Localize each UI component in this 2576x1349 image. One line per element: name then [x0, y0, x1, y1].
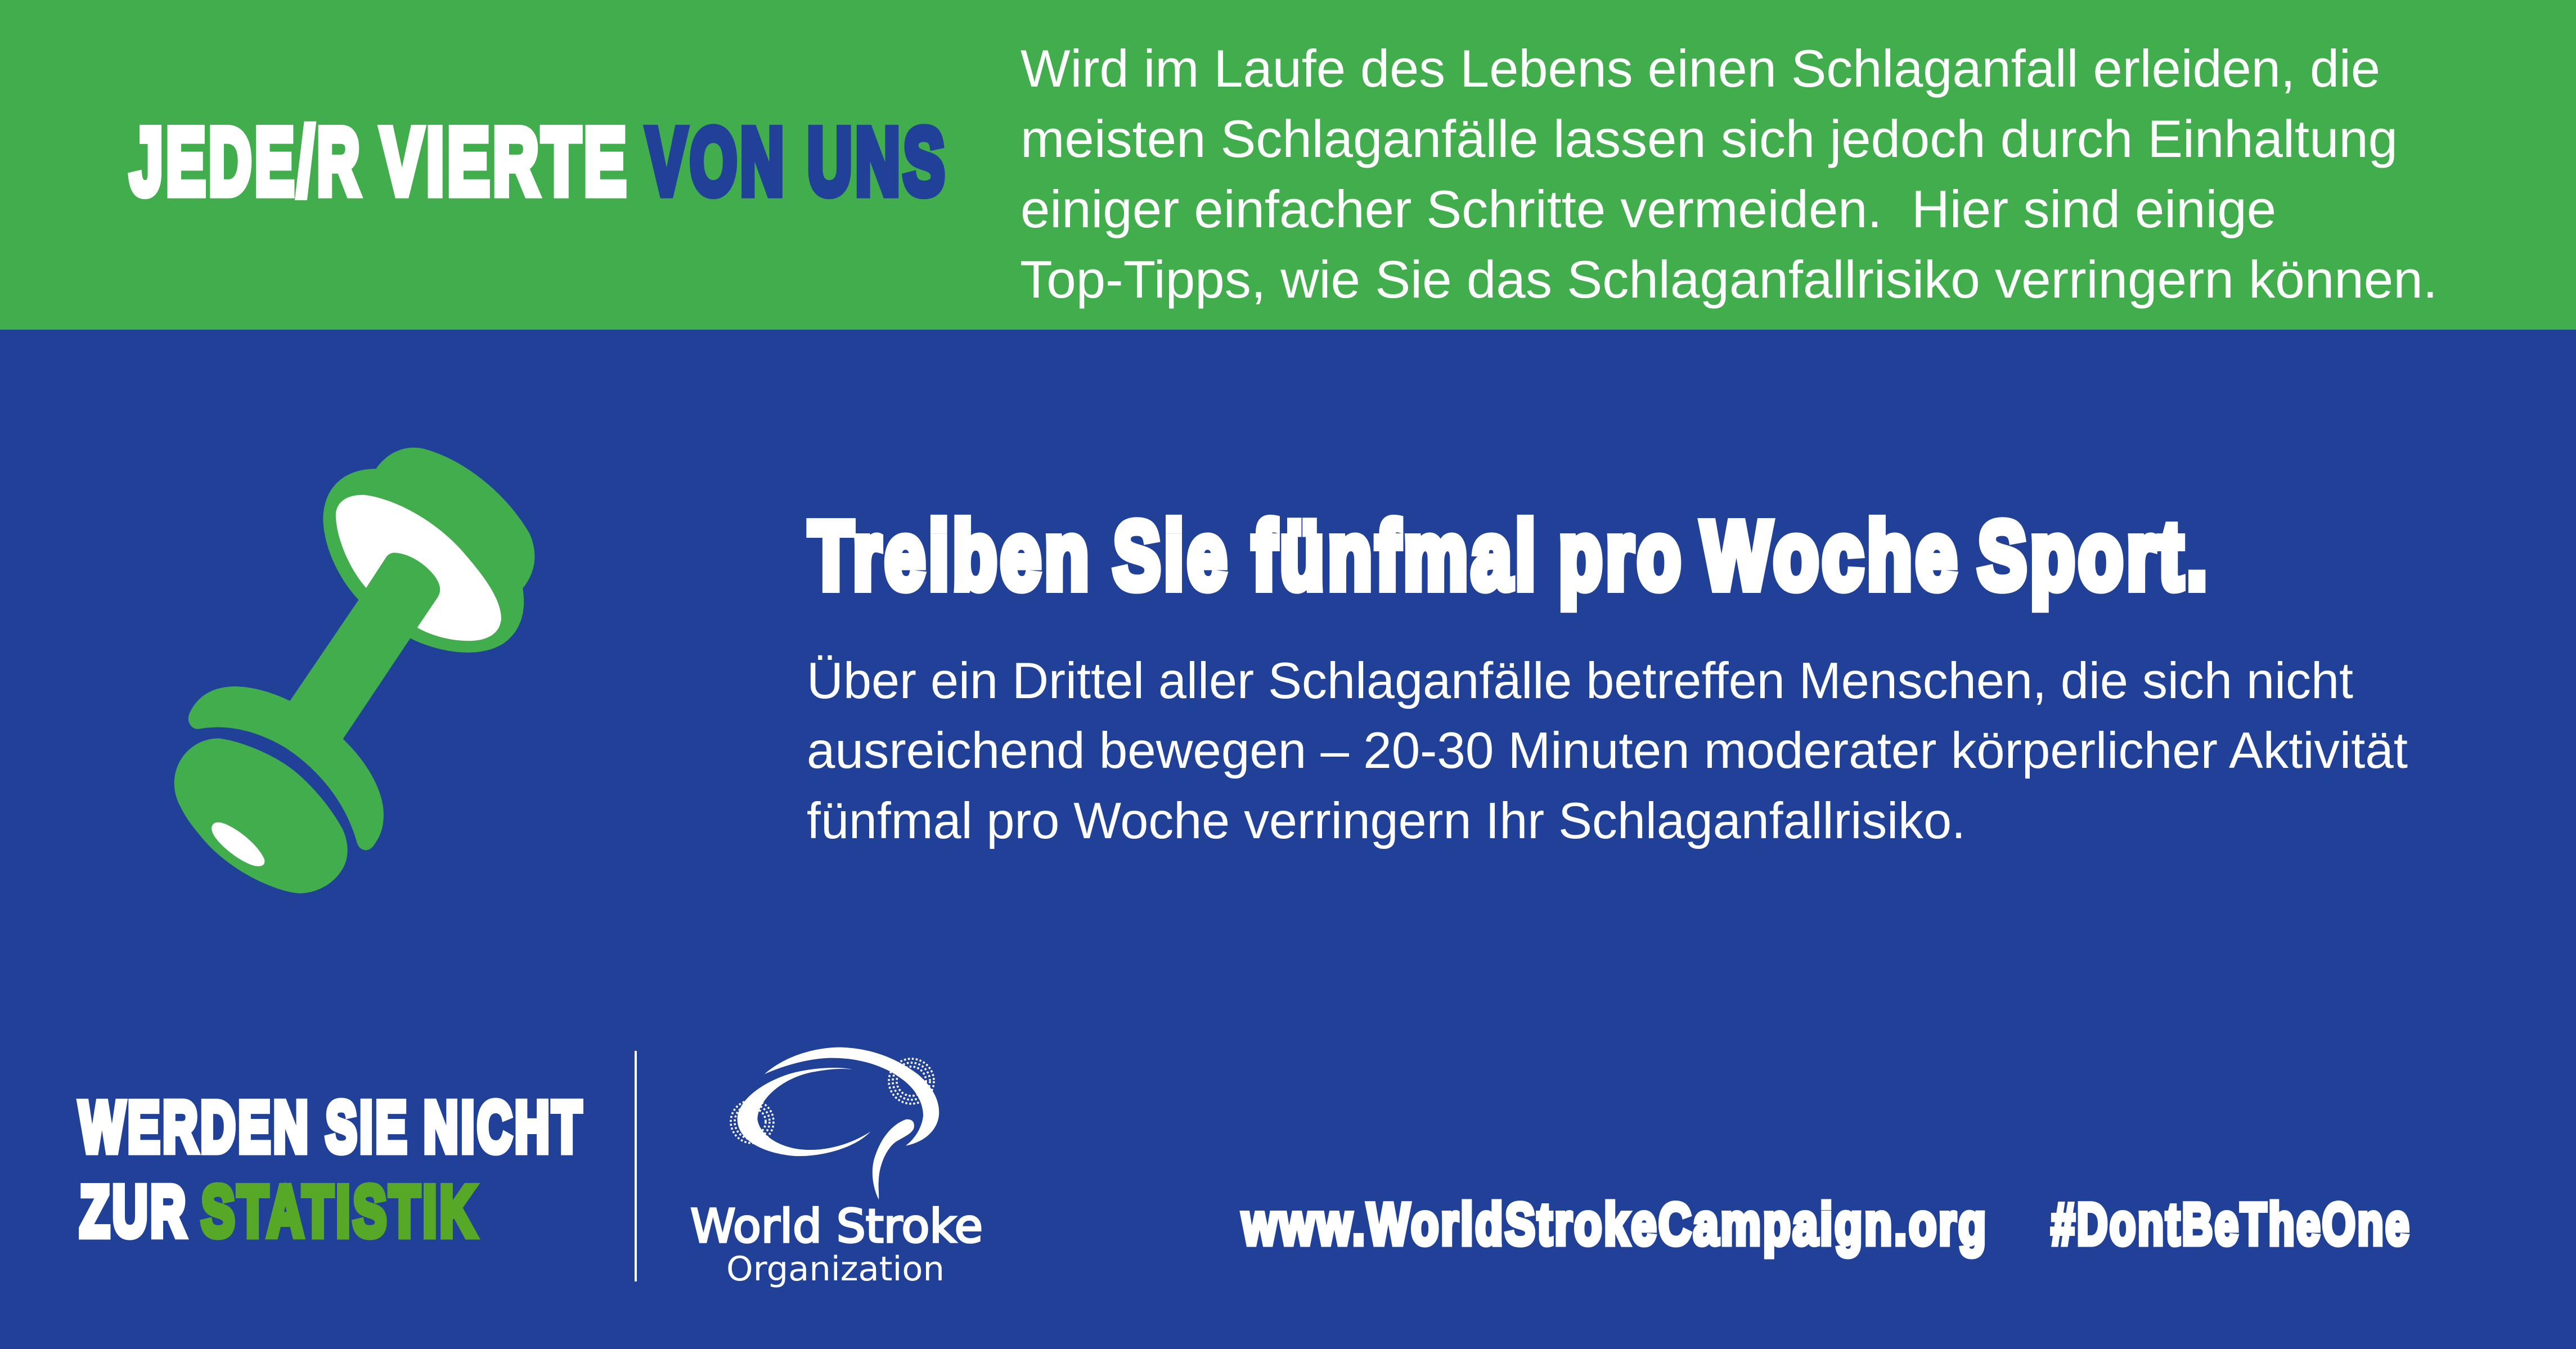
- panel: green header band: [0, 0, 2576, 330]
- logo: World Stroke Organization: [690, 1047, 983, 1289]
- heading: JEDE/R VIERTE VON UNS: [130, 109, 948, 214]
- text block: header introduction: meisten Schlaganfälle lassen sich jedoch durch Einhaltung: [1020, 109, 2398, 168]
- heading: Treiben Sie fünfmal pro Woche Sport.: Woche: [1702, 502, 1961, 609]
- logo wordmark: World Stroke: [690, 1200, 983, 1253]
- text block: exercise explanation: Über ein Drittel aller Schlaganfälle betreffen Menschen, die sich nicht: [807, 653, 2353, 709]
- footer: campaign website: www.WorldStrokeCampaign.org: [1242, 1191, 1988, 1257]
- slogan: WERDEN SIE NICHT ZUR STATISTIK: NICHT: [424, 1087, 585, 1167]
- text block: exercise explanation: fünfmal pro Woche verringern Ihr Schlaganfallrisiko.: [807, 793, 1966, 849]
- heading: JEDE/R VIERTE VON UNS: VON: [646, 109, 787, 214]
- heading: Treiben Sie fünfmal pro Woche Sport.: [809, 502, 2211, 609]
- heading: JEDE/R VIERTE VON UNS: VIERTE: [381, 109, 630, 214]
- icon: dumbbell: [174, 448, 534, 893]
- text block: exercise explanation: [807, 653, 2408, 849]
- slogan: WERDEN SIE NICHT ZUR STATISTIK: SIE: [326, 1087, 410, 1167]
- heading: Treiben Sie fünfmal pro Woche Sport.: pro: [1559, 502, 1684, 609]
- divider line: [635, 1051, 637, 1281]
- slogan: WERDEN SIE NICHT ZUR STATISTIK: ZUR: [80, 1171, 188, 1251]
- logo wordmark: Organization: [726, 1249, 945, 1289]
- heading: Treiben Sie fünfmal pro Woche Sport.: Sie: [1113, 502, 1230, 609]
- logo brain mark: [738, 1047, 939, 1200]
- heading: JEDE/R VIERTE VON UNS: JEDE/R: [130, 109, 363, 214]
- footer: campaign hashtag: #DontBeTheOne: [2051, 1191, 2411, 1257]
- text block: exercise explanation: ausreichend bewegen – 20-30 Minuten moderater körperlicher Aktivität: [807, 722, 2408, 779]
- heading: Treiben Sie fünfmal pro Woche Sport.: Treiben: [809, 502, 1093, 609]
- slogan: WERDEN SIE NICHT ZUR STATISTIK: [79, 1087, 585, 1251]
- heading: JEDE/R VIERTE VON UNS: UNS: [807, 109, 948, 214]
- text block: header introduction: Wird im Laufe des Lebens einen Schlaganfall erleiden, die: [1020, 39, 2380, 98]
- heading: Treiben Sie fünfmal pro Woche Sport.: Sport.: [1978, 502, 2211, 609]
- slogan: WERDEN SIE NICHT ZUR STATISTIK: STATISTIK: [201, 1171, 479, 1251]
- slogan: WERDEN SIE NICHT ZUR STATISTIK: WERDEN: [79, 1087, 311, 1167]
- logo halftone dots: [731, 1059, 934, 1143]
- text block: header introduction: einiger einfacher Schritte vermeiden. Hier sind einige: [1020, 179, 2276, 239]
- logo wordmark: [690, 1200, 983, 1289]
- text block: header introduction: [1020, 39, 2438, 309]
- text block: header introduction: Top-Tipps, wie Sie das Schlaganfallrisiko verringern können.: [1020, 250, 2438, 309]
- heading: Treiben Sie fünfmal pro Woche Sport.: fünfmal: [1252, 502, 1539, 609]
